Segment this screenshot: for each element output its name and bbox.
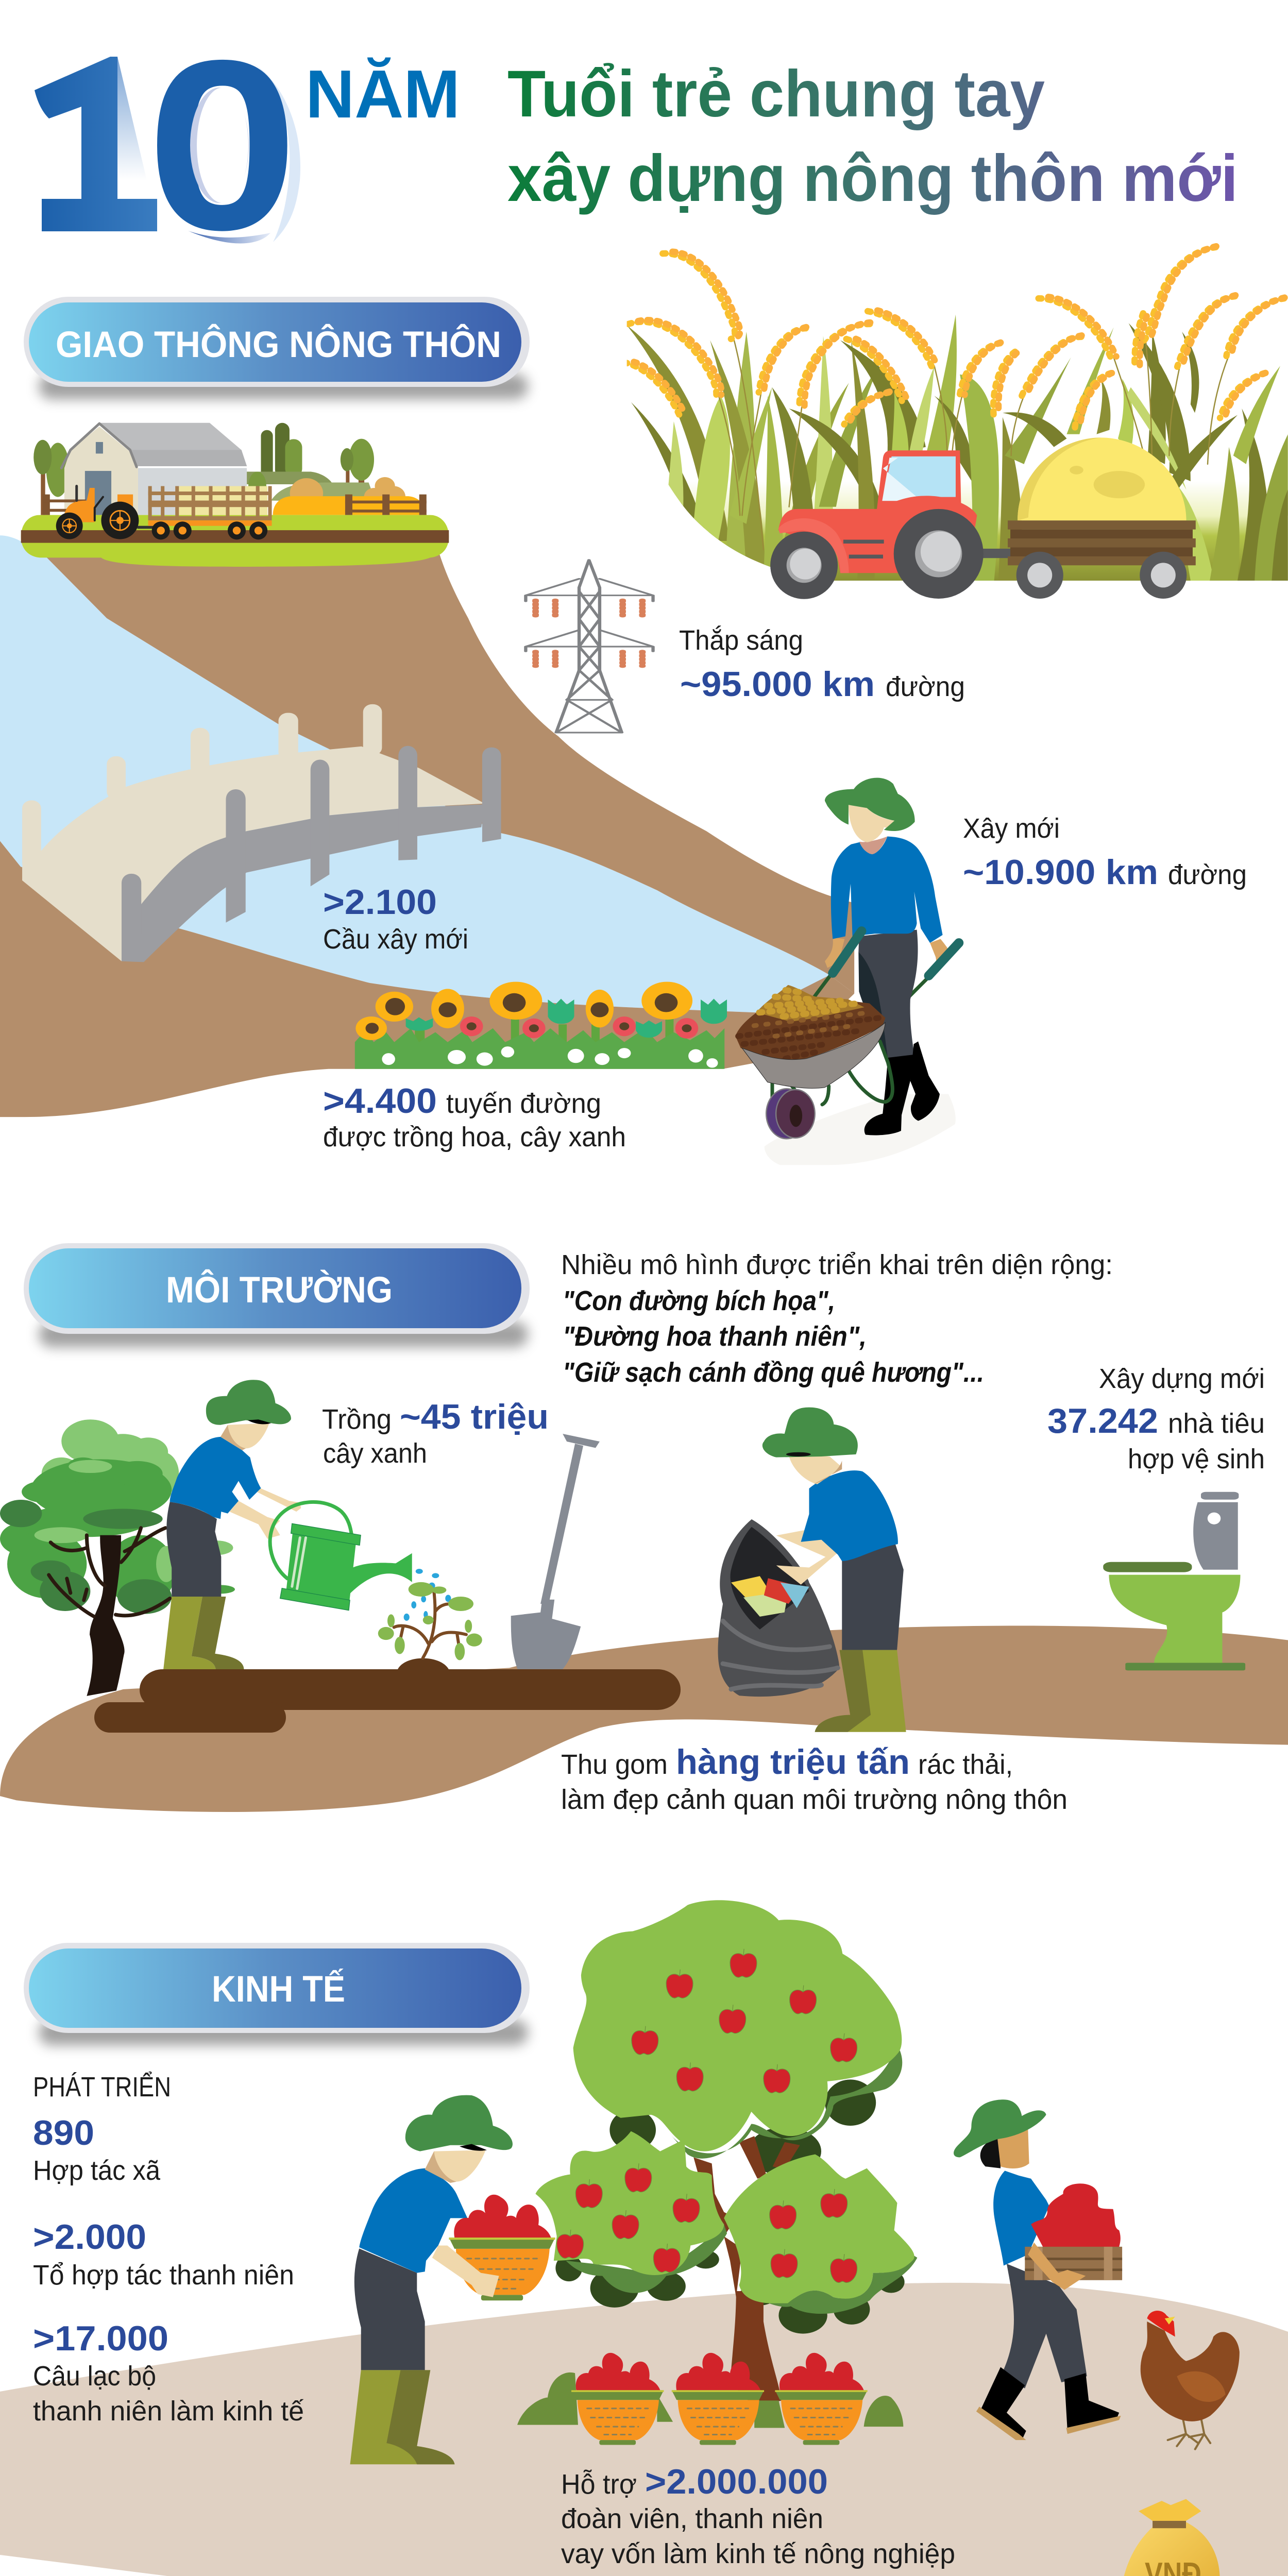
farmer with watering can — [163, 1380, 301, 1670]
stat: nhà tiêu hợp vệ sinh: Xây dựng mới — [1099, 1363, 1265, 1394]
stats: phát triển: >2.000 — [33, 2217, 146, 2257]
stats: phát triển: >17.000 — [33, 2319, 168, 2358]
stat: nhà tiêu hợp vệ sinh: hợp vệ sinh — [1128, 1444, 1265, 1475]
text: mô hình triển khai: Nhiều mô hình được triển khai trên diện rộng: — [561, 1249, 1113, 1280]
stat: xây mới đường: đường — [1168, 859, 1247, 890]
stat: hỗ trợ vay vốn: vay vốn làm kinh tế nông nghiệp — [561, 2538, 955, 2569]
stat: tuyến đường hoa — [323, 1081, 626, 1153]
water drops — [404, 1569, 451, 1621]
big number 10 — [35, 10, 300, 280]
stats: phát triển: PHÁT TRIỂN — [33, 2072, 171, 2103]
upper river bank — [45, 554, 854, 994]
heading: giao thông nông thôn: GIAO THÔNG NÔNG THÔN — [56, 324, 501, 365]
text: mô hình triển khai: "Giữ sạch cánh đồng quê hương"... — [563, 1357, 984, 1388]
big tractor with hay cart — [770, 437, 1196, 599]
soil mounds — [94, 1669, 681, 1733]
stats: phát triển: 890 — [33, 2113, 94, 2153]
stats: phát triển — [33, 2072, 304, 2427]
lower river bank — [0, 841, 854, 1117]
bridge — [22, 704, 501, 962]
stat: cầu xây mới — [323, 883, 468, 955]
icon: money bag — [1121, 2499, 1227, 2576]
stat: nhà tiêu hợp vệ sinh: nhà tiêu — [1168, 1408, 1265, 1439]
panel: kinh tế — [0, 1900, 1288, 2576]
stat: thu gom rác thải — [561, 1742, 1067, 1815]
icon: toilet — [1103, 1492, 1245, 1670]
sapling — [378, 1582, 482, 1670]
stat: hỗ trợ vay vốn — [561, 2462, 1099, 2576]
tree — [0, 1419, 235, 1696]
farmer with apple basket — [350, 2095, 555, 2464]
stat: hỗ trợ vay vốn: >2.000.000 — [645, 2462, 828, 2501]
illustration: ground, shovel, second farmer, toilet — [0, 1408, 1288, 1812]
stat: hỗ trợ vay vốn: Hỗ trợ — [561, 2469, 637, 2500]
stat: thắp sáng: ~95.000 km — [680, 665, 875, 704]
headline: Tuổi trẻ chung tay — [507, 57, 1045, 131]
heading: giao thông nông thôn — [24, 297, 530, 399]
stat: trồng cây xanh — [322, 1397, 549, 1469]
stat: cầu xây mới: >2.100 — [323, 883, 437, 922]
heading: kinh tế: KINH TẾ — [212, 1969, 345, 2010]
heading: môi trường: MÔI TRƯỜNG — [166, 1269, 393, 1311]
watering can — [270, 1502, 412, 1611]
icon: power pylon — [526, 560, 653, 733]
rice field and tractor — [618, 245, 1288, 599]
apple trees — [517, 1900, 917, 2445]
headline — [507, 57, 1238, 215]
farmer with trash bag — [718, 1408, 906, 1732]
river — [0, 535, 829, 1012]
shovel — [511, 1434, 600, 1669]
stat: thắp sáng: đường — [886, 671, 965, 702]
stat: trồng cây xanh: ~45 triệu — [400, 1397, 549, 1436]
stat: thu gom rác thải: làm đẹp cảnh quan môi trường nông thôn — [561, 1784, 1067, 1815]
heading: kinh tế — [24, 1943, 530, 2045]
big number 10: 1 — [52, 36, 149, 276]
stat: hỗ trợ vay vốn: đoàn viên, thanh niên — [561, 2503, 823, 2534]
text: mô hình triển khai: "Con đường bích họa", — [563, 1285, 835, 1316]
farmer carrying crate — [954, 2099, 1122, 2440]
ground — [0, 2283, 1288, 2576]
big number 10: 0 — [146, 10, 298, 280]
stat: cầu xây mới: Cầu xây mới — [323, 924, 468, 955]
stat: thu gom rác thải: hàng triệu tấn — [676, 1742, 910, 1782]
ground — [0, 1626, 1288, 1812]
panel: môi trường — [0, 1243, 1288, 1815]
stat: tuyến đường hoa: tuyến đường — [446, 1088, 601, 1119]
stat: nhà tiêu hợp vệ sinh — [1047, 1363, 1265, 1475]
stats: phát triển: Câu lạc bộ — [33, 2361, 156, 2392]
stat: nhà tiêu hợp vệ sinh: 37.242 — [1047, 1401, 1158, 1440]
illustration: orchard scene — [350, 1900, 1240, 2576]
stat: thắp sáng — [679, 625, 965, 704]
stat: tuyến đường hoa: được trồng hoa, cây xanh — [323, 1122, 626, 1153]
farmer with wheelbarrow — [736, 778, 959, 1165]
stat: thắp sáng: Thắp sáng — [679, 625, 803, 656]
title — [35, 10, 1238, 280]
stat: xây mới đường — [963, 813, 1247, 892]
icon: chicken — [1141, 2311, 1240, 2449]
heading: môi trường — [24, 1243, 530, 1347]
mini farm — [21, 423, 449, 567]
stat: tuyến đường hoa: >4.400 — [323, 1081, 437, 1121]
illustration: tree, watering farmer, sapling — [0, 1380, 482, 1696]
stat: xây mới đường: ~10.900 km — [963, 853, 1158, 892]
stats: phát triển: Tổ hợp tác thanh niên — [33, 2260, 294, 2291]
panel: giao thông nông thôn — [0, 245, 1288, 1165]
stat: xây mới đường: Xây mới — [963, 813, 1060, 844]
headline: xây dựng nông thôn mới — [507, 142, 1238, 215]
text: mô hình triển khai — [561, 1249, 1113, 1388]
stat: trồng cây xanh: cây xanh — [323, 1438, 427, 1469]
stats: phát triển: thanh niên làm kinh tế — [33, 2396, 304, 2427]
stat: thu gom rác thải: Thu gom — [561, 1749, 668, 1780]
illustration: land and bridge — [0, 535, 854, 1117]
stat: thu gom rác thải: rác thải, — [918, 1749, 1013, 1780]
text: mô hình triển khai: "Đường hoa thanh niên", — [563, 1321, 867, 1352]
flower bed — [355, 982, 727, 1069]
stat: trồng cây xanh: Trồng — [322, 1404, 392, 1435]
label NĂM: NĂM — [306, 56, 460, 132]
stats: phát triển: Hợp tác xã — [33, 2155, 161, 2186]
rice field — [618, 245, 1288, 581]
